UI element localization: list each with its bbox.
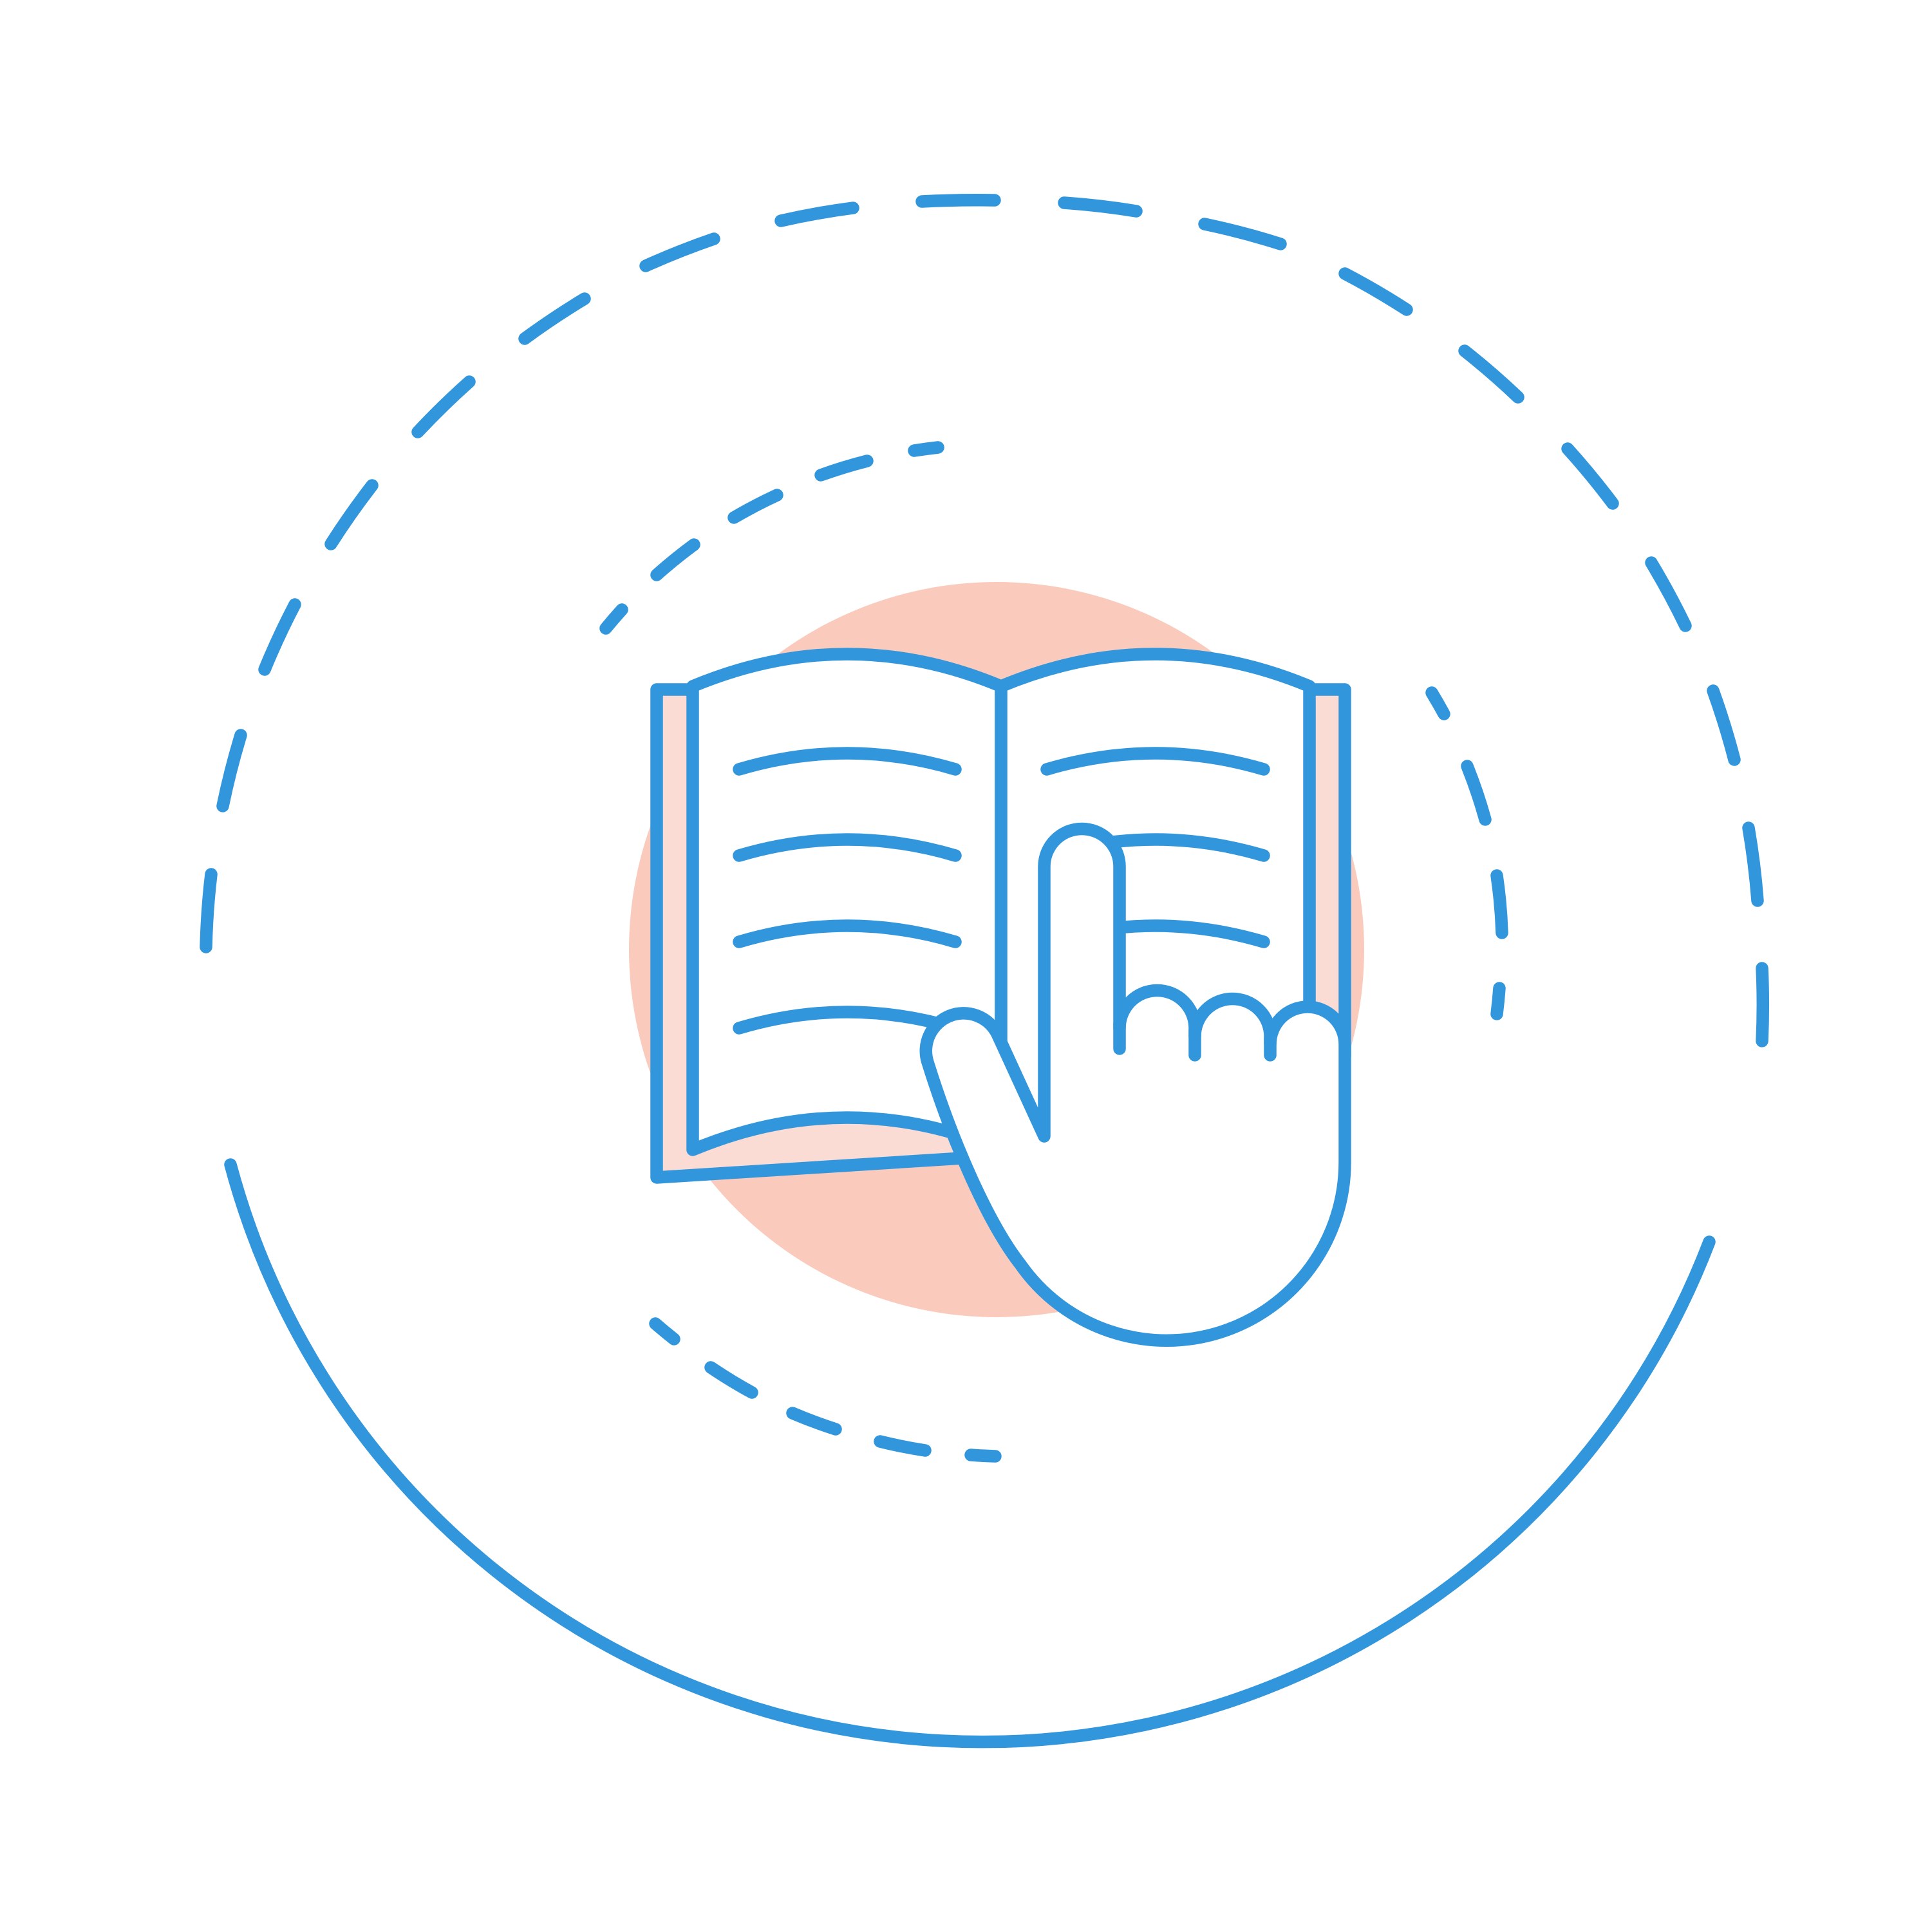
cover outline <box>657 689 1345 1177</box>
pink background circle <box>629 582 1364 1317</box>
finger separators <box>1120 1024 1270 1055</box>
book cover <box>657 689 1345 1177</box>
pointing hand <box>926 829 1345 1340</box>
left page <box>693 654 1001 1150</box>
hand outline <box>926 829 1345 1340</box>
book <box>657 654 1345 1177</box>
right page text lines <box>1047 753 1264 942</box>
left page text lines <box>739 753 955 1028</box>
outer solid arc <box>230 1165 1709 1742</box>
inner dashed ring <box>606 447 1502 1456</box>
outer dashed ring <box>206 200 1763 1041</box>
right page <box>1001 654 1309 1150</box>
